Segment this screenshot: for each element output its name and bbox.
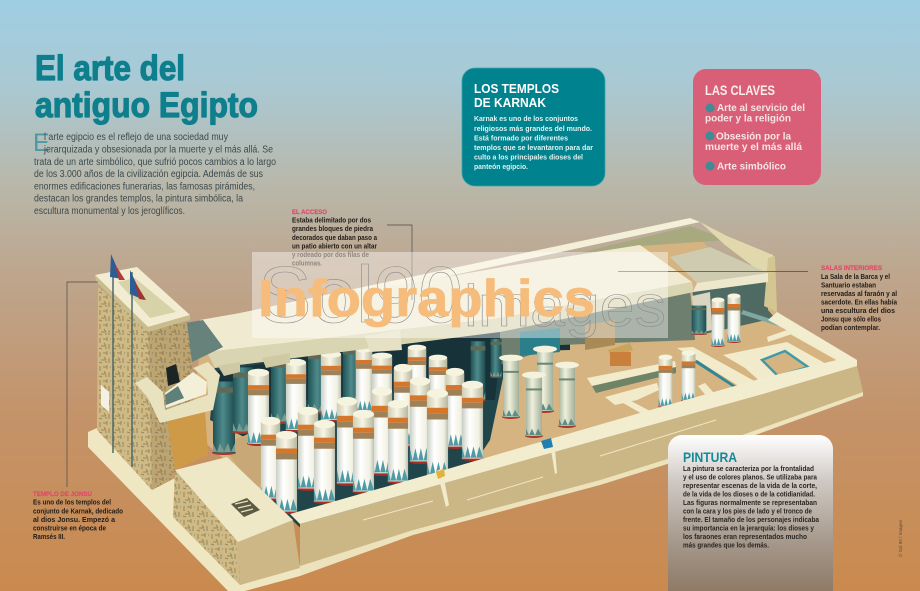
intro text block	[33, 129, 276, 217]
panel: los templos de Karnak: DE KARNAK	[474, 95, 547, 110]
intro text block: l arte egipcio es el reflejo de una sociedad muy	[44, 132, 228, 143]
panel: las claves: Obsesión por la	[716, 130, 791, 142]
intro text block: de los 3.000 años de la civilización egipcia. Además de sus	[34, 169, 263, 180]
panel: las claves: Arte al servicio del	[717, 102, 805, 114]
panel: pintura: de la vida de los dioses o de la cotidianidad.	[683, 490, 815, 498]
watermark: Sol90	[258, 250, 463, 339]
panel: las claves: muerte y el más allá	[705, 141, 802, 153]
columns: plain courtyard and sanctuary	[499, 346, 579, 438]
title: El arte del	[35, 49, 185, 88]
intro text block: destacan los grandes templos, la pintura simbólica, la	[34, 194, 243, 204]
dark hypostyle interior	[210, 325, 510, 532]
watermark	[252, 250, 668, 339]
panel: los templos de Karnak: Está formado por diferentes	[474, 134, 568, 142]
callout: templo de Jonsu: conjunto de Karnak, dedicado	[33, 508, 123, 516]
intro text block: trata de un arte simbólico, que sufrió pocos cambios a lo largo	[34, 157, 276, 168]
sanctuary inner walls	[587, 310, 843, 415]
callout: salas interiores: una escultura del dios	[821, 308, 895, 315]
callout: el acceso: columnas.	[292, 260, 322, 268]
panel: los templos de Karnak: culto a los principales dioses del	[474, 152, 583, 162]
panel: pintura: con la cara y los pies de lado y el tronco de	[683, 506, 812, 516]
callout: el acceso: y rodeado por dos filas de	[292, 252, 369, 259]
front wall	[290, 312, 863, 576]
panel: los templos de Karnak: panteón egipcio.	[474, 162, 528, 171]
callout: el acceso: EL ACCESO	[292, 209, 327, 216]
panel: los templos de Karnak	[462, 68, 605, 186]
roof of hypostyle hall	[200, 245, 768, 376]
callout: el acceso	[292, 209, 377, 268]
callout: templo de Jonsu: construirse en época de	[33, 526, 106, 532]
panel: las claves: LAS CLAVES	[705, 83, 775, 98]
far chamber shadow	[692, 277, 775, 335]
flag poles and flags	[110, 254, 146, 467]
callout: templo de Jonsu: Es uno de los templos del	[33, 500, 111, 506]
callout: salas interiores: Jonsu que sólo ellos	[821, 316, 881, 324]
panel: pintura: los faraones eran representados mucho	[683, 532, 808, 541]
title	[35, 49, 258, 125]
panel: los templos de Karnak: LOS TEMPLOS	[474, 81, 559, 96]
temple illustration	[88, 218, 863, 591]
panel: los templos de Karnak: templos que se levantaron para dar	[474, 143, 593, 152]
intro text block: jerarquizada y obsesionada por la muerte y el más allá. Se	[43, 144, 273, 156]
back wall of the courtyard	[500, 290, 695, 365]
temple floor	[190, 230, 850, 524]
columns: dark back row	[212, 339, 502, 455]
callout: templo de Jonsu: Ramsés III.	[33, 534, 65, 541]
callout: templo de Jonsu	[33, 491, 123, 541]
callout: salas interiores: podían contemplar.	[821, 325, 880, 332]
panel: pintura: más grandes que los demás.	[683, 540, 769, 550]
panel: pintura: y el uso de colores planos. Se utilizaba para	[683, 472, 818, 482]
panel: pintura: La pintura se caracteriza por la frontalidad	[683, 464, 814, 473]
panel: pintura: representar escenas de la vida de la corte,	[683, 481, 817, 490]
panel: las claves: Arte simbólico	[717, 160, 786, 172]
panel: pintura: su importancia en la jerarquía: los dioses y	[683, 524, 814, 532]
callout: el acceso: decorados que daban paso a	[292, 235, 377, 242]
lower gate block	[173, 470, 240, 585]
leader lines	[67, 225, 808, 487]
intro text block: enormes edificaciones funerarias, las famosas pirámides,	[34, 182, 255, 192]
title: antiguo Egipto	[35, 86, 258, 125]
panel: pintura	[668, 435, 833, 591]
callout: el acceso: Estaba delimitado por dos	[292, 218, 371, 224]
intro text block: escultura monumental y los jeroglíficos.	[34, 206, 185, 217]
panel: los templos de Karnak: Karnak es uno de los conjuntos	[474, 114, 578, 123]
panel: las claves: poder y la religión	[705, 112, 791, 124]
callout: salas interiores: reservadas al faraón y al	[821, 291, 897, 298]
callout: salas interiores: sacerdote. En ellas había	[821, 300, 897, 306]
callout: el acceso: un patio abierto con un altar	[292, 244, 377, 250]
icon: pylon tower and gate	[95, 254, 300, 585]
image credit: © Sol 90 / Images	[897, 519, 904, 557]
watermark: images	[464, 274, 666, 339]
callout: salas interiores	[821, 265, 897, 332]
intro text block: E	[33, 129, 50, 157]
temple base platform	[88, 428, 300, 591]
callout: salas interiores: La Sala de la Barca y el	[821, 274, 890, 281]
panel: pintura: PINTURA	[683, 449, 737, 465]
watermark: Infographics	[258, 270, 595, 328]
panel: pintura: Las figuras normalmente se representaban	[683, 498, 817, 507]
courtyard altar	[608, 343, 633, 366]
callout: salas interiores: SALAS INTERIORES	[821, 265, 882, 272]
callout: templo de Jonsu: TEMPLO DE JONSU	[33, 491, 92, 498]
panel: pintura: frente. El tamaño de los personajes indicaba	[683, 515, 820, 524]
callout: salas interiores: Santuario estaban	[821, 282, 876, 290]
callout: el acceso: grandes bloques de piedra	[292, 226, 373, 233]
panel: las claves	[693, 69, 821, 185]
columns: hypostyle hall	[247, 345, 484, 514]
columns: inner chambers	[658, 294, 741, 408]
back wall with white coping	[240, 218, 777, 320]
panel: los templos de Karnak: religiosos más grandes del mundo.	[474, 124, 592, 133]
callout: templo de Jonsu: al dios Jonsu. Empezó a	[33, 517, 115, 524]
